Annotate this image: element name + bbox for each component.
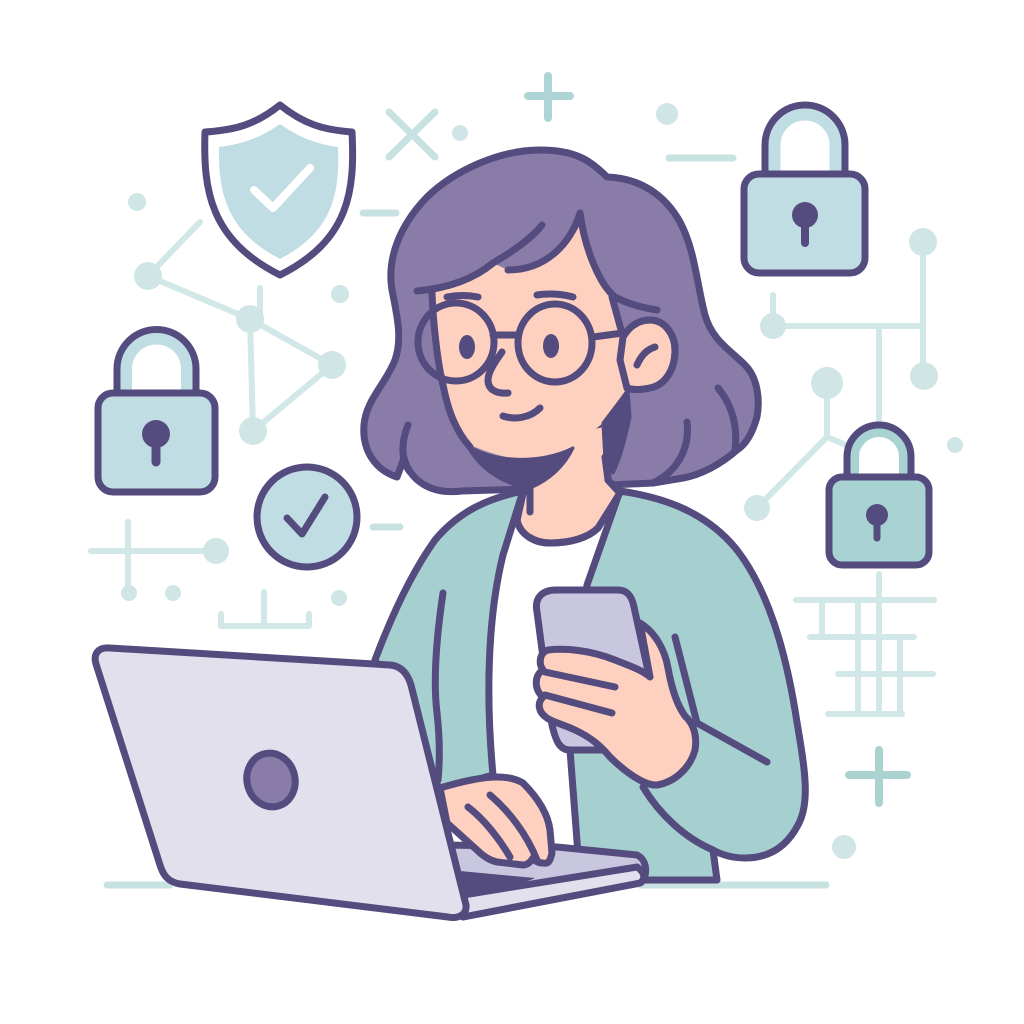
right circuit lines [744, 228, 963, 521]
eyes [459, 335, 475, 359]
left network graph [128, 193, 349, 445]
icon: padlock left [98, 330, 215, 492]
cardigan [375, 491, 805, 880]
lower right plus and dot [832, 750, 907, 859]
icon: round check badge [257, 467, 357, 567]
hair strand lines [403, 388, 736, 483]
knuckle lines [468, 795, 537, 860]
laptop logo [241, 748, 301, 812]
icon: padlock lower right [829, 425, 929, 565]
icon: padlock top right [744, 105, 865, 273]
icon: shield with check [205, 105, 353, 275]
finger lines [545, 672, 615, 713]
nose and mouth [488, 352, 540, 418]
person [95, 150, 805, 918]
jaw line [432, 293, 470, 447]
background decoration: network lines and symbols [91, 76, 963, 885]
neck and collar outline [517, 457, 620, 543]
laptop screen [95, 648, 466, 918]
hair [364, 150, 758, 492]
top plus and cross symbols [363, 76, 733, 527]
eyebrows [447, 294, 573, 297]
hand holding phone [536, 623, 696, 785]
shadow under chin and neck [467, 390, 630, 488]
fringe lines [417, 213, 657, 337]
desk line [107, 882, 826, 888]
face [432, 225, 660, 459]
phone [536, 590, 650, 750]
glasses [418, 303, 623, 382]
laptop base [445, 845, 646, 917]
hand on keyboard [440, 777, 552, 865]
right grid lattice [796, 574, 934, 714]
ear [620, 320, 675, 390]
lower left circuit [91, 522, 347, 626]
neck [517, 423, 620, 543]
